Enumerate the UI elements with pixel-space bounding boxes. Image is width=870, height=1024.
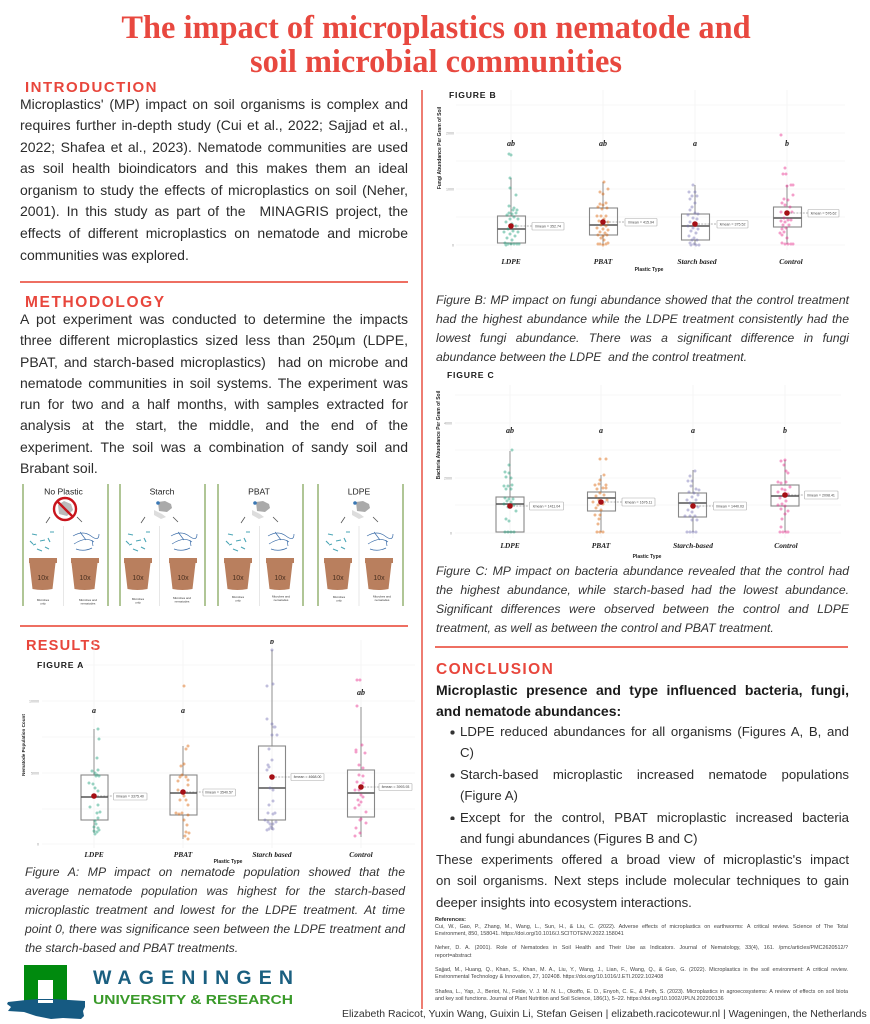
- box: starch based: [258, 650, 324, 830]
- caption: figure A: the starch-based and PBAT treatments.: [25, 941, 238, 955]
- box: PBAT: x̄mean = 1676.11: [625, 500, 652, 504]
- logo wordmark: [93, 967, 293, 1007]
- y axis: 1000: [446, 188, 454, 192]
- diagram panel: no plastic: Microbes and: [79, 598, 97, 602]
- caption: figure A: average nematode population was highest for the starch-based: [25, 884, 405, 898]
- bullet list: (Figure A): [460, 788, 518, 803]
- box: control: x̄mean = 2098.41: [807, 494, 835, 498]
- text block: next steps: on soil organisms. Next steps include molecular techniques to gain: [436, 873, 849, 888]
- column divider: [421, 90, 423, 1009]
- category labels: Control: [349, 850, 374, 859]
- significance letters: a: [181, 706, 185, 715]
- text block: introduction: 2022; Shafea et al., 2023). Nematode communities are used: [20, 139, 408, 155]
- significance letters: ab: [507, 139, 515, 148]
- caption: figure B: had the highest abundance while the LDPE treatment consistently had the: [436, 312, 849, 326]
- box: starch based: x̄mean = 1440.03: [716, 504, 744, 508]
- y axis: 0: [37, 842, 39, 846]
- text block: introduction: [20, 96, 408, 263]
- heading: conclusion: CONCLUSION: [436, 661, 554, 678]
- bullet list: and fungi abundances (Figures B and C): [460, 831, 698, 846]
- significance letters: ab: [599, 139, 607, 148]
- title: soil microbial communities: [250, 44, 622, 80]
- diagram panel: PBAT: only: [235, 598, 241, 602]
- text block: methodology: nematode communities in soil systems. The experiment was: [20, 375, 408, 391]
- category labels: [500, 257, 804, 266]
- y axis: [21, 700, 39, 846]
- references: report=abstract: [435, 953, 471, 959]
- chart: figure C bacteria abundance: [436, 370, 838, 560]
- significance letters: a: [599, 426, 603, 435]
- caption: figure C: Significant differences were observed between the control and LDPE: [436, 602, 849, 616]
- caption: figure C: Figure C: MP impact on bacteria abundance revealed that the control had: [436, 564, 849, 578]
- figure label: FIGURE C: [447, 370, 494, 380]
- box: control: x̄mean = 3993.93: [381, 785, 409, 789]
- diagram panel: PBAT: [218, 484, 303, 606]
- text block: introduction: requires further in-depth study (Cui et al., 2022; Sajjad et al.,: [20, 117, 408, 133]
- text block: introduction: Microplastics' (MP) impact on soil organisms is complex and: [20, 96, 408, 112]
- bullet list: Starch-based microplastic increased nematode populations: [460, 767, 849, 782]
- y axis: 2000: [444, 476, 452, 480]
- category labels: PBAT: [592, 541, 611, 550]
- text block: methodology: experiment. The soil was a combination of sandy soil and: [20, 439, 408, 455]
- category labels: PBAT: [174, 850, 193, 859]
- text block: next steps: [436, 852, 849, 910]
- x axis title: Plastic Type: [214, 859, 243, 865]
- bullet list: LDPE reduced abundances for all organisms (Figures A, B, and: [460, 724, 849, 739]
- significance letters: b: [783, 426, 787, 435]
- references: Neher, D. A. (2001). Role of Nematodes in Soil Health and Their Use as Indicators. Journal of Nematology, 33(4), 161. /pmc/articles/PMC2620512/?: [435, 945, 848, 951]
- text block: methodology: analysis at the start, the middle, and the end of the: [20, 417, 408, 433]
- diagram panel: no plastic: No Plastic: [44, 486, 84, 496]
- significance letters: ab: [506, 426, 514, 435]
- panel: methodology: [20, 294, 408, 627]
- text block: methodology: [20, 311, 408, 476]
- box: starch based: [682, 185, 748, 245]
- text block: methodology: A pot experiment was conducted to determine the impacts: [20, 311, 408, 327]
- diagram panel: LDPE: 10x: [332, 575, 344, 582]
- box: PBAT: x̄mean = 3540.57: [205, 790, 233, 794]
- chart: figure B fungi abundance: [437, 90, 840, 273]
- category labels: [499, 541, 799, 550]
- box: PBAT: x̄mean = 415.94: [628, 220, 654, 224]
- diagram panel: PBAT: 10x: [232, 575, 244, 582]
- references: References:: [435, 916, 466, 922]
- diagram panel: no plastic: only: [40, 602, 46, 606]
- box: LDPE: [81, 729, 147, 834]
- diagram panel: starch: 10x: [177, 575, 189, 582]
- references: Environmental Technology & Innovation, 27, 102408. https://doi.org/10.1016/J.ETI.2022.102408: [435, 974, 663, 980]
- text block: introduction: effects of different microplastics on nematode and microbe: [20, 225, 408, 241]
- diagram panel: starch: Starch: [150, 486, 175, 496]
- diagram panel: PBAT: nematodes: [274, 598, 289, 602]
- box: starch based: x̄mean = 375.52: [719, 222, 745, 226]
- references: Cui, W., Gao, P., Zhang, M., Wang, L., Sun, H., & Liu, C. (2022). Adverse effects of microplastics on earthworms: A critical review. Science of The Total: [435, 924, 848, 930]
- heading: methodology: METHODOLOGY: [25, 294, 166, 311]
- significance letters: a: [693, 139, 697, 148]
- text block: introduction: communities was explored.: [20, 247, 189, 263]
- caption: figure A: point 0, there was significance seen between the LDPE treatment and: [25, 922, 405, 936]
- bullet list: C): [460, 745, 474, 760]
- caption: figure B: lowest fungi abundance. There was a significant difference in fungi: [436, 331, 849, 345]
- diagram panel: starch: Microbes: [132, 597, 145, 601]
- caption: figure C: treatment, as well as between the control and PBAT treatment.: [436, 621, 774, 635]
- diagram panel: no plastic: nematodes: [81, 602, 96, 606]
- y axis: [436, 390, 452, 536]
- references: Sajjad, M., Huang, Q., Khan, S., Khan, M. A., Liu, Y., Wang, J., Lian, F., Wang, Q., & Guo, G. (2022). Microplastics in the soil environment: A critical review.: [435, 967, 848, 973]
- significance letters: [92, 637, 365, 715]
- footer: authors and affiliation: Elizabeth Racicot, Yuxin Wang, Guixin Li, Stefan Geisen | elizabeth.racicotewur.nl | Wageningen, the Netherlands: [342, 1009, 867, 1020]
- box: LDPE: [496, 450, 564, 532]
- diagram panel: no plastic: Microbes: [37, 598, 50, 602]
- category labels: Starch based: [252, 850, 292, 859]
- diagram panel: LDPE: Microbes and: [373, 594, 391, 598]
- box: control: [771, 460, 838, 532]
- diagram panel: no plastic: 10x: [79, 575, 91, 582]
- box: LDPE: x̄mean = 3375.40: [116, 794, 144, 798]
- heading: introduction: INTRODUCTION: [25, 79, 158, 96]
- text block: key finding: and nematode abundances:: [436, 703, 621, 719]
- figure label: FIGURE A: [37, 660, 84, 670]
- y axis: Nematode Population Count: [21, 714, 26, 776]
- y axis: 0: [452, 244, 454, 248]
- box: LDPE: [498, 154, 564, 245]
- y axis: 5000: [31, 772, 39, 776]
- bullet list: Except for the control, PBAT microplastic increased bacteria: [460, 810, 849, 825]
- references: and key soil functions. Journal of Plant Nutrition and Soil Science, 186(1), 5–22. https://doi.org/10.1002/JPLN.202200136: [435, 996, 724, 1002]
- box: LDPE: x̄mean = 352.74: [535, 224, 561, 228]
- text block: introduction: as soil health bioindicators and this makes them an ideal: [20, 160, 408, 176]
- heading: results: RESULTS: [26, 638, 101, 654]
- text block: methodology: three different microplastics sized less than 250µm (LDPE,: [20, 332, 408, 348]
- text block: key finding: Microplastic presence and type influenced bacteria, fungi,: [436, 682, 849, 698]
- text block: next steps: These experiments offered a broad view of microplastic's impact: [436, 852, 849, 866]
- category labels: [83, 850, 374, 859]
- title: [121, 10, 751, 80]
- caption: figure B: [436, 293, 850, 364]
- diagram panel: LDPE: LDPE: [348, 486, 370, 496]
- diagram panel: PBAT: Microbes: [232, 595, 245, 599]
- text block: next steps: deeper insights into ecosystem interactions.: [436, 895, 692, 910]
- box: starch based: [678, 470, 746, 532]
- references: Environment, 850, 158041. https://doi.org/10.1016/J.SCITOTENV.2022.158041: [435, 931, 624, 937]
- box: control: [774, 135, 839, 244]
- bullet markers: [450, 730, 454, 820]
- category labels: Starch based: [677, 257, 717, 266]
- y axis: 4000: [444, 422, 452, 426]
- y axis: 2000: [446, 132, 454, 136]
- logo mark: [7, 965, 85, 1019]
- y axis: 10000: [29, 700, 39, 704]
- category labels: LDPE: [499, 541, 520, 550]
- x axis title: Plastic Type: [635, 267, 664, 273]
- diagram panel: starch: [120, 484, 205, 606]
- category labels: PBAT: [594, 257, 613, 266]
- significance letters: b: [785, 139, 789, 148]
- diagram panel: LDPE: 10x: [373, 575, 385, 582]
- text block: key finding: [436, 682, 849, 719]
- category labels: LDPE: [83, 850, 104, 859]
- diagram panel: no plastic: [23, 484, 108, 606]
- diagram panel: starch: only: [135, 600, 141, 604]
- box: control: [348, 680, 412, 837]
- caption: figure B: abundance between the LDPE and the control treatment.: [436, 350, 747, 364]
- box: PBAT: [588, 459, 655, 532]
- chart: figure A nematode population: [21, 640, 412, 865]
- significance letters: [507, 139, 789, 148]
- caption: figure B: Figure B: MP impact on fungi abundance showed that the control treatment: [436, 293, 849, 307]
- category labels: Control: [774, 541, 799, 550]
- diagram panel: PBAT: PBAT: [248, 486, 271, 496]
- caption: figure C: the highest abundance, while starch-based had the lowest abundance.: [436, 583, 849, 597]
- significance letters: a: [691, 426, 695, 435]
- y axis: 0: [450, 532, 452, 536]
- diagram panel: LDPE: Microbes: [333, 595, 346, 599]
- box: PBAT: [590, 182, 657, 245]
- category labels: Control: [779, 257, 804, 266]
- text block: introduction: organism to study the effects of microplastics on soil (Neher,: [20, 182, 408, 198]
- references: Shafea, L., Yap, J., Beriot, N., Felde, V. J. M. N. L., Okoffo, E. D., Enyoh, C. E., & Peth, S. (2023). Microplastics in agroecosystems: A review of effects on soil biota: [435, 989, 848, 995]
- diagram panel: starch: nematodes: [175, 600, 190, 604]
- diagram panel: LDPE: nematodes: [375, 598, 390, 602]
- x axis title: Plastic Type: [633, 554, 662, 560]
- logo: Wageningen University & Research: [7, 965, 293, 1019]
- panel: introduction: [20, 79, 408, 283]
- y axis: Bacteria Abundance Per Gram of Soil: [436, 390, 442, 479]
- text block: methodology: PBAT, and starch-based microplastics) had on microbe and: [20, 354, 408, 370]
- figure label: FIGURE B: [449, 90, 496, 100]
- y axis: [437, 106, 454, 248]
- diagram panel: LDPE: [318, 484, 403, 606]
- diagram: experimental design: [22, 484, 404, 606]
- y axis: Fungi Abundance Per Gram of Soil: [437, 106, 443, 189]
- panel: conclusion: [436, 661, 849, 910]
- caption: figure A: [24, 865, 406, 955]
- title: The impact of microplastics on nematode and: [121, 10, 751, 46]
- diagram panel: LDPE: only: [336, 598, 342, 602]
- box: control: x̄mean = 576.62: [810, 212, 836, 216]
- logo wordmark: WAGENINGEN: [93, 967, 293, 989]
- significance letters: [506, 426, 787, 435]
- box: PBAT: [170, 686, 236, 839]
- caption: figure C: [436, 564, 850, 635]
- text block: methodology: run for two and a half months, with samples extracted for: [20, 396, 408, 412]
- text block: introduction: 2001). In this study as part of the MINAGRIS project, the: [20, 203, 408, 219]
- diagram panel: PBAT: Microbes and: [272, 594, 290, 598]
- box: starch based: x̄mean = 4668.00: [293, 775, 321, 779]
- diagram panel: starch: Microbes and: [173, 596, 191, 600]
- box: LDPE: x̄mean = 1411.04: [533, 504, 560, 508]
- significance letters: a: [92, 706, 96, 715]
- logo wordmark: UNIVERSITY & RESEARCH: [93, 993, 293, 1007]
- references: [435, 916, 848, 1002]
- category labels: Starch-based: [673, 541, 713, 550]
- text block: methodology: Brabant soil.: [20, 460, 98, 476]
- caption: figure A: microplastic treatment and lowest for the LDPE treatment. At time: [25, 903, 405, 917]
- significance letters: ab: [357, 688, 365, 697]
- diagram panel: starch: 10x: [132, 575, 144, 582]
- diagram panel: no plastic: 10x: [37, 575, 49, 582]
- diagram panel: PBAT: 10x: [274, 575, 286, 582]
- caption: figure A: Figure A: MP impact on nematode population showed that the: [25, 865, 405, 879]
- bullet list: [460, 724, 849, 846]
- category labels: LDPE: [500, 257, 521, 266]
